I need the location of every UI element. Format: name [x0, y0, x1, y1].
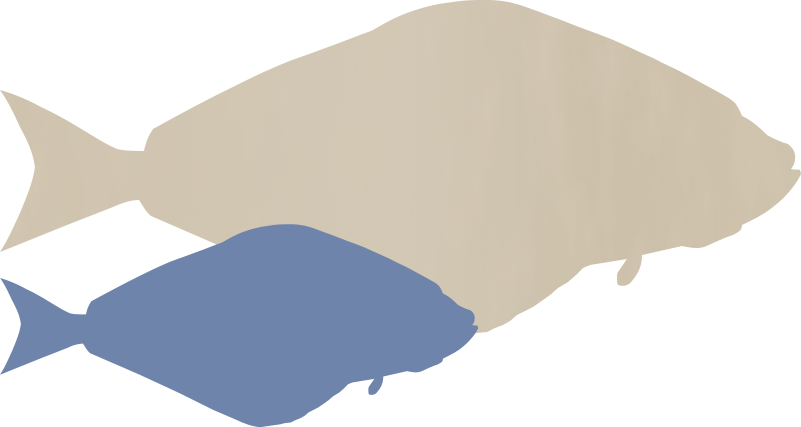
large fish silhouette	[0, 0, 801, 340]
small fish silhouette	[0, 224, 478, 427]
